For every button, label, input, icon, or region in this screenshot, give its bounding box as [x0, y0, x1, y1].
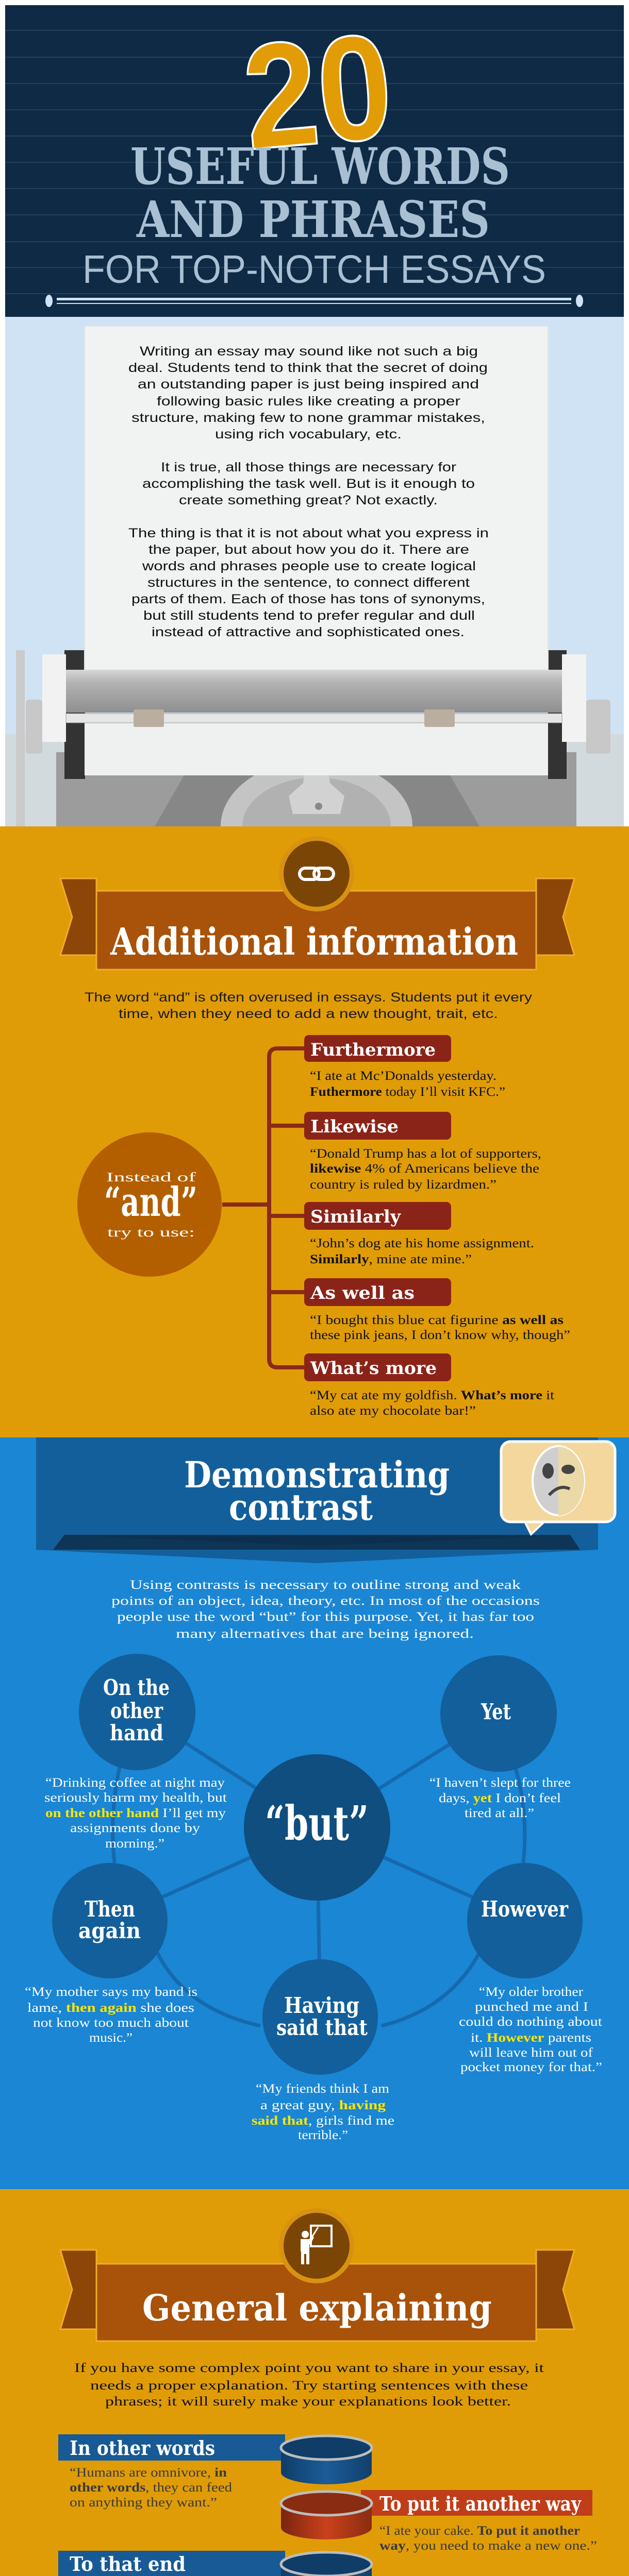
item: to put it another way: “I ate your cake. To put it another: [379, 2524, 580, 2538]
panel: demonstrating contrast: [0, 1437, 629, 2190]
circle: on the other hand: [79, 1654, 195, 1770]
circle: instead of and: Instead of: [106, 1171, 196, 1184]
quote: having said that: terrible.”: [298, 2128, 348, 2142]
quote: then again: [25, 1985, 197, 2045]
quote: however: pocket money for that.”: [460, 2060, 602, 2074]
circle: however: However: [481, 1896, 569, 1922]
quote: however: it. However parents: [471, 2031, 591, 2045]
intro text: contrast: people use the word “but” for this purpose. Yet, it has far too: [117, 1610, 534, 1624]
intro text: and: time, when they need to add a new thought, trait, etc.: [119, 1007, 498, 1021]
intro text: and: The word “and” is often overused in essays. Students put it every: [85, 990, 533, 1005]
circle: then again: Then: [85, 1896, 135, 1922]
intro paragraphs: It is true, all those things are necessary for: [161, 460, 456, 474]
title line: and phrases: AND PHRASES: [136, 190, 490, 249]
item: likewise: likewise 4% of Americans believe the: [310, 1162, 539, 1176]
quote: however: could do nothing about: [459, 2015, 602, 2029]
item: what's more: What’s more: [310, 1358, 437, 1379]
intro paragraphs: parts of them. Each of those has tons of synonyms,: [131, 592, 485, 606]
intro text: explaining: [74, 2361, 544, 2409]
intro paragraphs: words and phrases people use to create logical: [142, 559, 476, 573]
item: as well as: “I bought this blue cat figurine as well as: [310, 1313, 564, 1327]
intro text: contrast: points of an object, idea, theory, etc. In most of the occasions: [111, 1594, 540, 1608]
item: to put it another way: [281, 2490, 597, 2553]
circle: yet: [440, 1655, 557, 1772]
item: what's more: also ate my chocolate bar!”: [310, 1404, 476, 1418]
intro paragraphs: the paper, but about how you do it. There are: [148, 543, 469, 557]
intro paragraphs: [128, 344, 489, 639]
item: to put it another way: To put it another way: [379, 2492, 582, 2515]
intro paragraphs: instead of attractive and sophisticated ones.: [152, 625, 465, 639]
quote: then again: music.”: [89, 2031, 133, 2045]
circle: then again: [52, 1863, 168, 1978]
item: similarly: Similarly: [310, 1207, 401, 1227]
heading banner: demonstrating contrast: [36, 1437, 598, 1563]
intro paragraphs: an outstanding paper is just being inspired and: [138, 377, 479, 392]
item: what's more: [304, 1353, 554, 1418]
quote: yet: “I haven’t slept for three: [429, 1776, 571, 1790]
item: likewise: [304, 1112, 541, 1192]
item: as well as: these pink jeans, I don’t know why, though”: [310, 1328, 570, 1342]
intro paragraphs: structures in the sentence, to connect different: [147, 575, 470, 590]
circle: instead of and: [77, 1132, 222, 1277]
item: furthermore: Furthermore: [310, 1040, 436, 1060]
quote: then again: lame, then again she does: [27, 2001, 194, 2015]
item: what's more: “My cat ate my goldfish. What’s more it: [310, 1388, 554, 1402]
banner: additional information: Additional information: [110, 920, 518, 963]
item: similarly: [304, 1202, 534, 1266]
banner: additional information: [60, 878, 574, 970]
intro paragraphs: structure, making few to none grammar mistakes,: [131, 411, 485, 425]
panel: general explaining: [0, 2189, 629, 2576]
circle: instead of and: try to use:: [107, 1226, 195, 1240]
intro text: contrast: Using contrasts is necessary to outline strong and weak: [130, 1578, 521, 1592]
intro paragraphs: accomplishing the task well. But is it enough to: [142, 477, 475, 491]
quote: on the other hand: morning.”: [105, 1837, 164, 1851]
item: likewise: “Donald Trump has a lot of supporters,: [310, 1147, 541, 1161]
banner: general explaining: [60, 2250, 574, 2341]
intro text: explaining: If you have some complex point you want to share in your essay, it: [74, 2361, 544, 2375]
circle: on the other hand: hand: [110, 1720, 163, 1745]
panel: additional information: [0, 826, 629, 1437]
item: furthermore: Futhermore today I’ll visit KFC.”: [310, 1085, 505, 1099]
quote: yet: days, yet I don’t feel: [439, 1791, 561, 1805]
circle: however: [467, 1863, 583, 1978]
quote: on the other hand: seriously harm my health, but: [44, 1791, 227, 1805]
quote: on the other hand: [44, 1776, 227, 1851]
intro paragraphs: deal. Students tend to think that the secret of doing: [128, 361, 488, 375]
item: similarly: “John’s dog ate his home assignment.: [310, 1236, 534, 1250]
icon: mask speech bubble: [501, 1442, 615, 1534]
quote: however: [459, 1985, 602, 2074]
item: as well as: As well as: [310, 1283, 415, 1303]
circle: on the other hand: On the: [103, 1675, 170, 1700]
banner: general explaining: General explaining: [142, 2286, 492, 2329]
title line: useful words: USEFUL WORDS: [130, 137, 510, 196]
quote: having said that: a great guy, having: [260, 2098, 386, 2112]
subtitle: FOR TOP-NOTCH ESSAYS: [82, 247, 546, 292]
item: likewise: country is ruled by lizardmen.”: [310, 1178, 496, 1192]
icon: chain link: [279, 836, 354, 911]
quote: however: will leave him out of: [469, 2046, 593, 2060]
item: likewise: Likewise: [310, 1116, 399, 1137]
item: in other words: other words , they can feed: [70, 2481, 233, 2495]
item: to put it another way: way , you need to make a new one.”: [379, 2539, 597, 2553]
circle: on the other hand: other: [110, 1698, 163, 1723]
item: in other words: “Humans are omnivore, in: [70, 2466, 227, 2480]
intro text: contrast: many alternatives that are being ignored.: [176, 1627, 474, 1641]
paper sheet: [85, 326, 548, 670]
heading banner: demonstrating contrast: contrast: [229, 1486, 373, 1529]
intro text: explaining: phrases; it will surely make your explanations look better.: [105, 2395, 511, 2409]
intro paragraphs: but still students tend to prefer regular and dull: [143, 608, 475, 623]
double rule divider: [45, 295, 583, 307]
intro text: contrast: [111, 1578, 540, 1641]
circle: then again: again: [78, 1918, 141, 1943]
typewriter body: [16, 650, 610, 826]
quote: having said that: said that , girls find me: [252, 2114, 394, 2128]
circle: having said that: said that: [276, 2015, 368, 2040]
intro paragraphs: Writing an essay may sound like not such a big: [140, 344, 478, 359]
intro text: explaining: needs a proper explanation. Try starting sentences with these: [90, 2379, 528, 2393]
quote: yet: tired at all.”: [465, 1806, 534, 1820]
quote: then again: not know too much about: [33, 2016, 189, 2030]
intro paragraphs: following basic rules like creating a proper: [157, 394, 460, 409]
item: in other words: In other words: [70, 2436, 215, 2460]
item: furthermore: [304, 1035, 505, 1099]
quote: yet: [429, 1776, 571, 1820]
quote: then again: “My mother says my band is: [25, 1985, 197, 1999]
intro text: and: [85, 990, 533, 1021]
center circle: but: “but”: [265, 1795, 369, 1851]
connector tree: [222, 1048, 304, 1367]
intro paragraphs: create something great? Not exactly.: [179, 493, 438, 507]
quote: however: “My older brother: [479, 1985, 584, 1999]
item: similarly: Similarly , mine ate mine.”: [310, 1252, 472, 1266]
item: as well as: [304, 1278, 570, 1342]
item: to that end: [58, 2551, 372, 2576]
intro paragraphs: The thing is that it is not about what you express in: [128, 526, 489, 540]
connector lines: contrast: [110, 1712, 525, 2026]
heading banner: demonstrating contrast: Demonstrating: [184, 1453, 450, 1496]
center circle: but: [244, 1754, 390, 1901]
quote: having said that: “My friends think I am: [256, 2082, 390, 2096]
quote: however: punched me and I: [475, 2000, 588, 2014]
quote: on the other hand: on the other hand I’ll get my: [45, 1806, 226, 1820]
quote: on the other hand: “Drinking coffee at night may: [45, 1776, 225, 1790]
circle: having said that: Having: [284, 1993, 359, 2018]
item: to that end: To that end: [70, 2552, 186, 2575]
intro panel: typewriter: [5, 317, 624, 827]
item: in other words: on anything they want.”: [70, 2496, 217, 2510]
header panel: [5, 2, 624, 317]
item: in other words: [58, 2434, 372, 2510]
quote: having said that: [252, 2082, 394, 2142]
intro paragraphs: using rich vocabulary, etc.: [215, 427, 402, 442]
title number 20: 20: [237, 2, 399, 181]
quote: on the other hand: assignments done by: [70, 1821, 201, 1835]
circle: instead of and: “and”: [104, 1179, 197, 1226]
icon: teacher at board: [279, 2208, 354, 2283]
circle: having said that: [262, 1959, 378, 2075]
circle: yet: Yet: [481, 1699, 511, 1724]
item: furthermore: “I ate at Mc’Donalds yesterday.: [310, 1069, 496, 1083]
